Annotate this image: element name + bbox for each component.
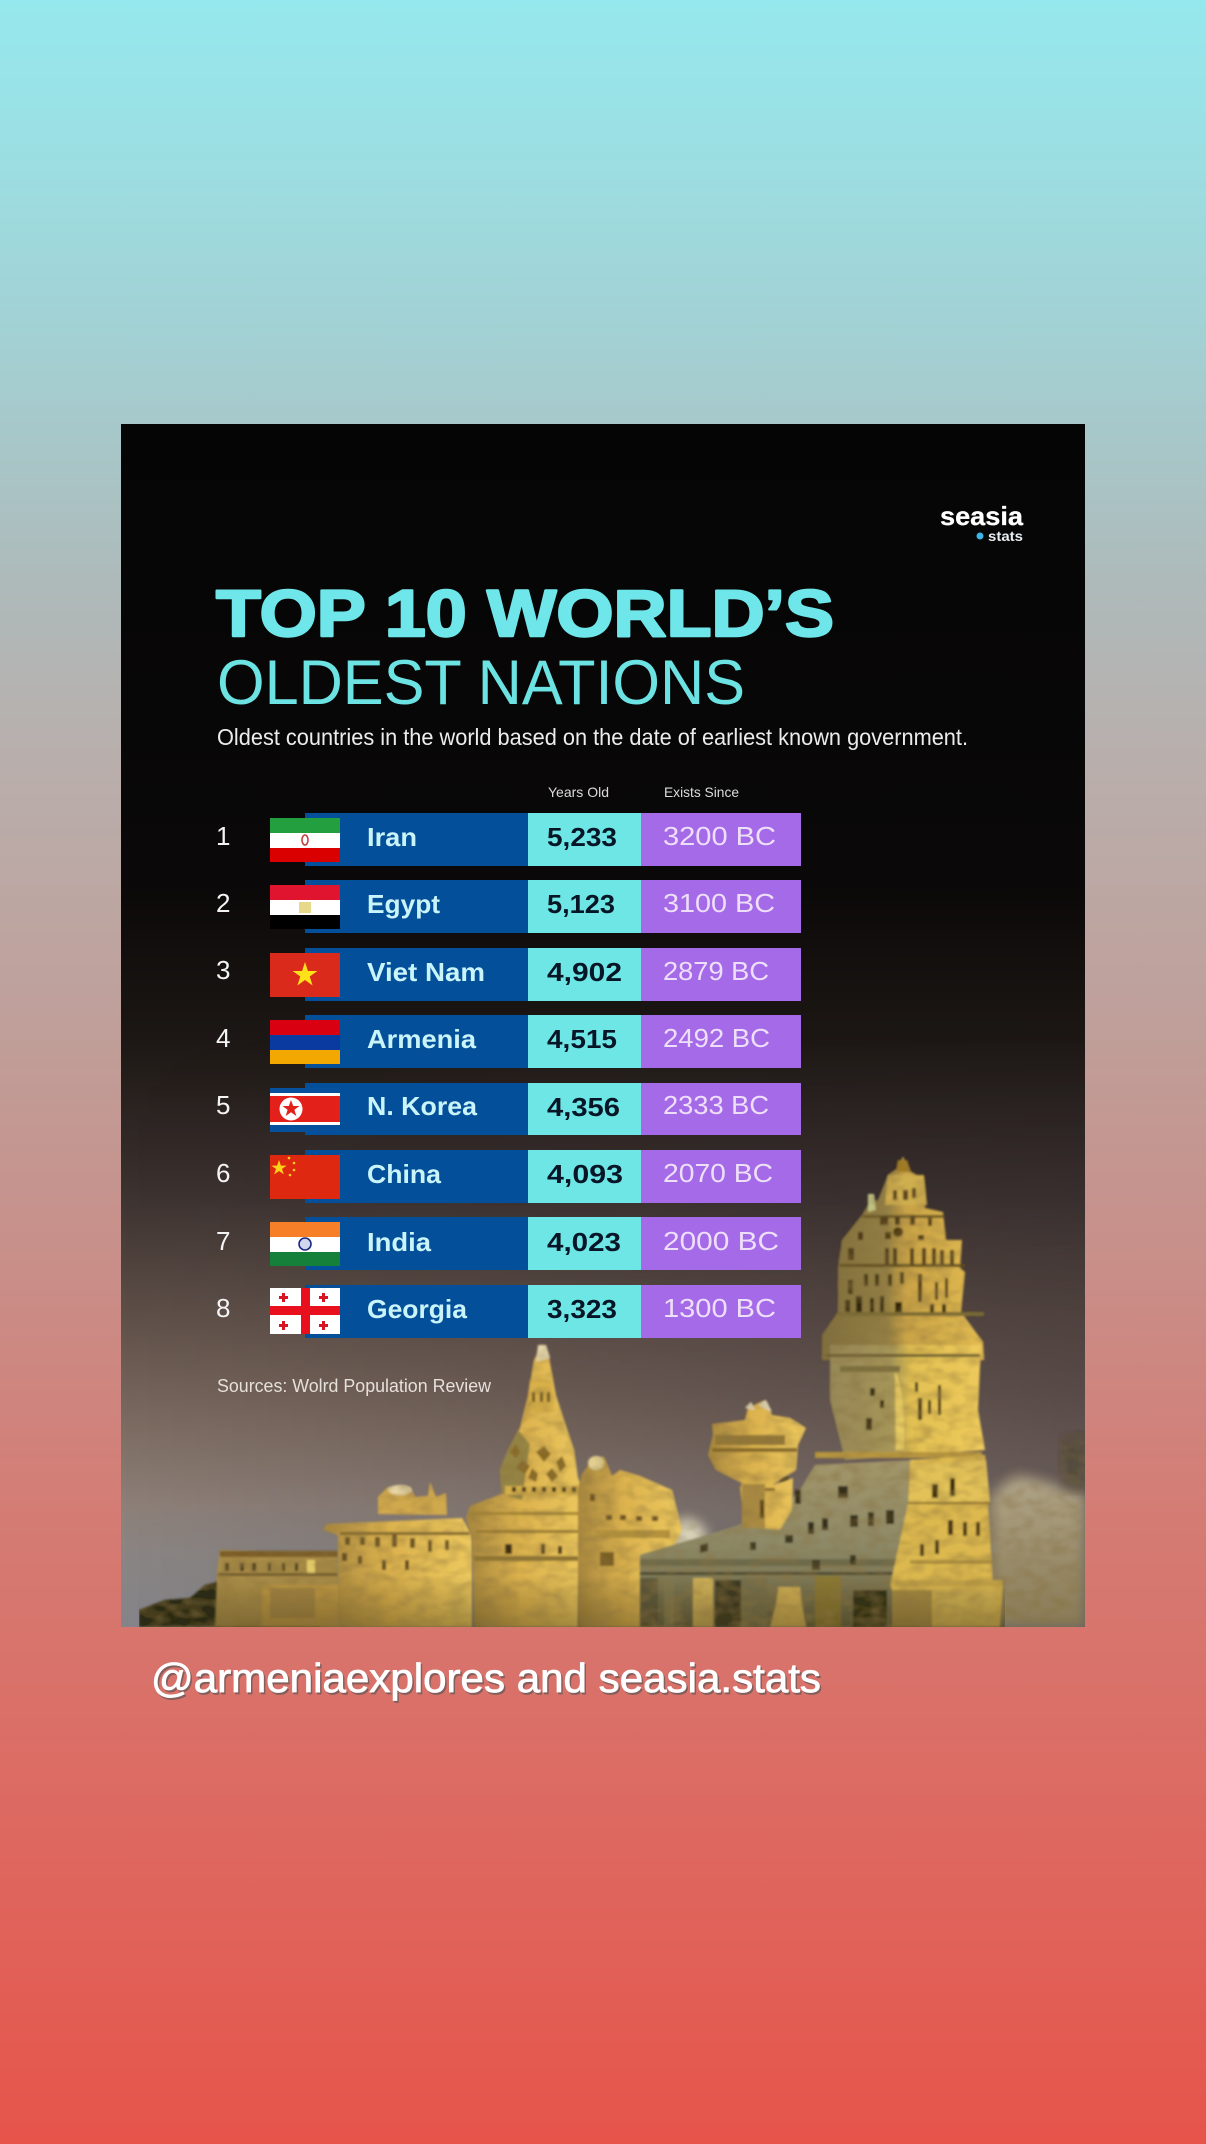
flag: Armenia bbox=[270, 1020, 340, 1064]
logo: seasia stats: stats bbox=[988, 528, 1023, 544]
title line 1: TOP 10 WORLD’S bbox=[216, 576, 834, 650]
source note: Sources: Wolrd Population Review bbox=[217, 1376, 492, 1396]
panel: infographic card bbox=[120, 424, 1086, 1628]
caption: credit line: @armeniaexplores and seasia.stats bbox=[151, 1655, 821, 1701]
smoke cloud at right bbox=[672, 1476, 1085, 1627]
round hall with crown bbox=[323, 1482, 472, 1627]
row 6: China: China bbox=[367, 1159, 442, 1189]
main great tower bbox=[815, 1156, 1003, 1627]
row 2: Egypt: 2 bbox=[216, 888, 230, 918]
row 5: N. Korea bbox=[216, 1083, 801, 1135]
upper storeys bbox=[822, 1156, 984, 1360]
domed hall right of central tower bbox=[578, 1456, 682, 1627]
row 7: India: India bbox=[367, 1227, 432, 1257]
flag: Egypt bbox=[270, 885, 340, 929]
row 6: China: 2070 BC bbox=[663, 1158, 773, 1188]
logo: seasia stats bbox=[940, 501, 1024, 544]
low shadow across the city base bbox=[215, 1575, 1005, 1627]
row 4: Armenia bbox=[216, 1015, 801, 1068]
title line 2: OLDEST NATIONS bbox=[217, 648, 745, 718]
row 1: Iran: 3200 BC bbox=[663, 821, 776, 851]
row 6: China bbox=[216, 1150, 801, 1203]
flag: Iran bbox=[270, 818, 340, 862]
row 1: Iran: 1 bbox=[216, 821, 230, 851]
grey middle terrace bbox=[640, 1460, 915, 1627]
row 2: Egypt: Egypt bbox=[367, 889, 440, 919]
row 6: China: 4,093 bbox=[547, 1159, 623, 1189]
row 4: Armenia: 4 bbox=[216, 1023, 230, 1053]
row 8: Georgia bbox=[216, 1285, 801, 1338]
panel background: dusk sky bbox=[120, 424, 1086, 1628]
row 1: Iran: 5,233 bbox=[547, 822, 617, 852]
row 5: N. Korea: N. Korea bbox=[367, 1091, 478, 1121]
row 1: Iran bbox=[216, 813, 801, 866]
row 8: Georgia: 8 bbox=[216, 1293, 230, 1323]
row 7: India bbox=[216, 1217, 801, 1270]
row 5: N. Korea: 4,356 bbox=[547, 1092, 620, 1122]
column header: exists since: Exists Since bbox=[664, 784, 739, 800]
lower storeys bbox=[890, 1455, 1003, 1627]
left wing wall bbox=[215, 1550, 340, 1627]
dark tree at far right bbox=[1060, 1435, 1085, 1490]
row 4: Armenia: 2492 BC bbox=[663, 1023, 770, 1053]
row 5: N. Korea: 5 bbox=[216, 1090, 230, 1120]
row 3: Viet Nam bbox=[216, 948, 801, 1001]
flag: Viet Nam bbox=[270, 953, 340, 997]
flag: North Korea bbox=[270, 1088, 340, 1132]
flag: India bbox=[270, 1222, 340, 1266]
central spired temple tower bbox=[466, 1344, 587, 1627]
row 8: Georgia: 3,323 bbox=[547, 1294, 617, 1324]
row 5: N. Korea: 2333 BC bbox=[663, 1090, 769, 1120]
flag: Georgia bbox=[270, 1288, 340, 1334]
row 1: Iran: Iran bbox=[367, 822, 417, 852]
logo: seasia stats: seasia bbox=[940, 501, 1024, 531]
row 6: China: 6 bbox=[216, 1158, 230, 1188]
flag: China bbox=[270, 1155, 340, 1199]
row 8: Georgia: Georgia bbox=[367, 1294, 468, 1324]
row 3: Viet Nam: 2879 BC bbox=[663, 956, 769, 986]
mid storeys bbox=[830, 1345, 985, 1460]
goblet-shaped tower bbox=[708, 1400, 806, 1530]
row 3: Viet Nam: 3 bbox=[216, 955, 230, 985]
caption: credit line: @armeniaexplores and seasia.stats bbox=[152, 1657, 823, 1703]
row 7: India: 2000 BC bbox=[663, 1226, 779, 1256]
row 2: Egypt: 5,123 bbox=[547, 889, 615, 919]
row 4: Armenia: Armenia bbox=[367, 1024, 477, 1054]
row 2: Egypt bbox=[216, 880, 801, 933]
illustration: golden ancient temple city bbox=[139, 1156, 1085, 1627]
row 3: Viet Nam: Viet Nam bbox=[367, 957, 485, 987]
row 8: Georgia: 1300 BC bbox=[663, 1293, 776, 1323]
row 2: Egypt: 3100 BC bbox=[663, 888, 775, 918]
dark foliage at left bbox=[139, 1580, 320, 1627]
subtitle: Oldest countries in the world based on the date of earliest known government. bbox=[217, 724, 968, 750]
row 3: Viet Nam: 4,902 bbox=[547, 957, 622, 987]
column header: years old: Years Old bbox=[548, 784, 609, 800]
row 4: Armenia: 4,515 bbox=[547, 1024, 617, 1054]
row 7: India: 7 bbox=[216, 1226, 230, 1256]
row 7: India: 4,023 bbox=[547, 1227, 621, 1257]
